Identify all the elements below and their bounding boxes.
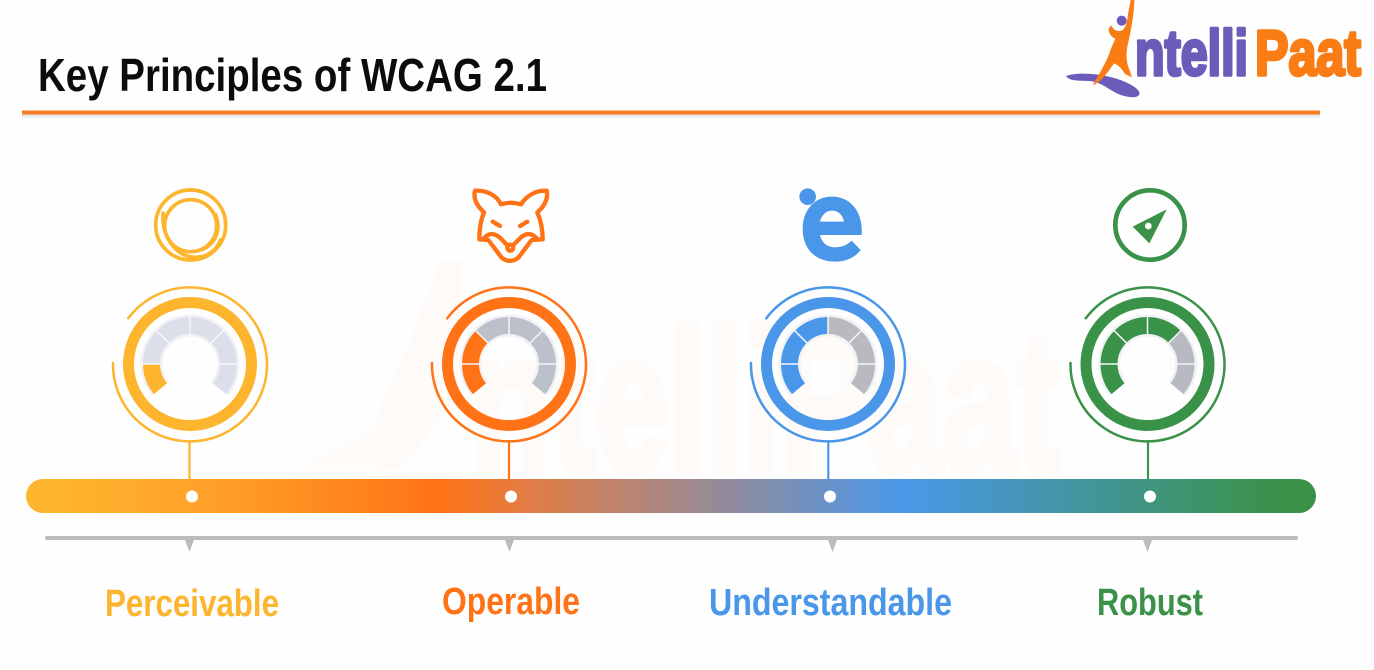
title underline <box>22 110 1320 119</box>
outer thin ring <box>432 287 586 441</box>
dial segments <box>460 315 558 389</box>
dial halo <box>152 325 228 389</box>
gauge: perceivable <box>113 287 267 441</box>
thick ring <box>448 302 570 426</box>
timeline dots <box>186 490 1156 502</box>
dial segments <box>779 315 877 389</box>
label: Robust: Robust <box>1097 582 1203 624</box>
label: Perceivable: Perceivable <box>105 583 279 625</box>
thick ring <box>128 302 252 426</box>
title: Key Principles of WCAG 2.1 <box>38 49 547 101</box>
logo figure <box>1066 0 1140 97</box>
gauge: robust <box>1070 287 1224 441</box>
gradient timeline bar <box>26 479 1316 513</box>
dial halo <box>1109 325 1186 389</box>
icon: compass <box>1115 190 1185 260</box>
outer thin ring <box>1070 287 1224 441</box>
icon: circle swirl <box>156 190 226 260</box>
logo: Intellipaat <box>1066 0 1361 97</box>
dial halo <box>470 325 548 389</box>
dial segments <box>141 315 239 389</box>
logo wordmark: ntelli <box>1135 17 1248 89</box>
grey bracket line with ticks <box>45 536 1298 552</box>
outer thin ring <box>751 287 905 441</box>
thick ring <box>766 302 890 426</box>
connector stems <box>190 441 1148 479</box>
dial segments <box>1098 315 1196 389</box>
gauge: understandable <box>751 287 905 441</box>
outer thin ring <box>113 287 267 441</box>
gauge: operable <box>432 287 586 441</box>
label: Understandable: Understandable <box>709 582 952 624</box>
label: Operable: Operable <box>442 581 580 623</box>
dial halo <box>790 325 866 389</box>
logo wordmark <box>1135 17 1361 89</box>
icon: fox <box>475 191 547 261</box>
icon: letter e <box>799 188 862 262</box>
thick ring <box>1086 302 1209 426</box>
